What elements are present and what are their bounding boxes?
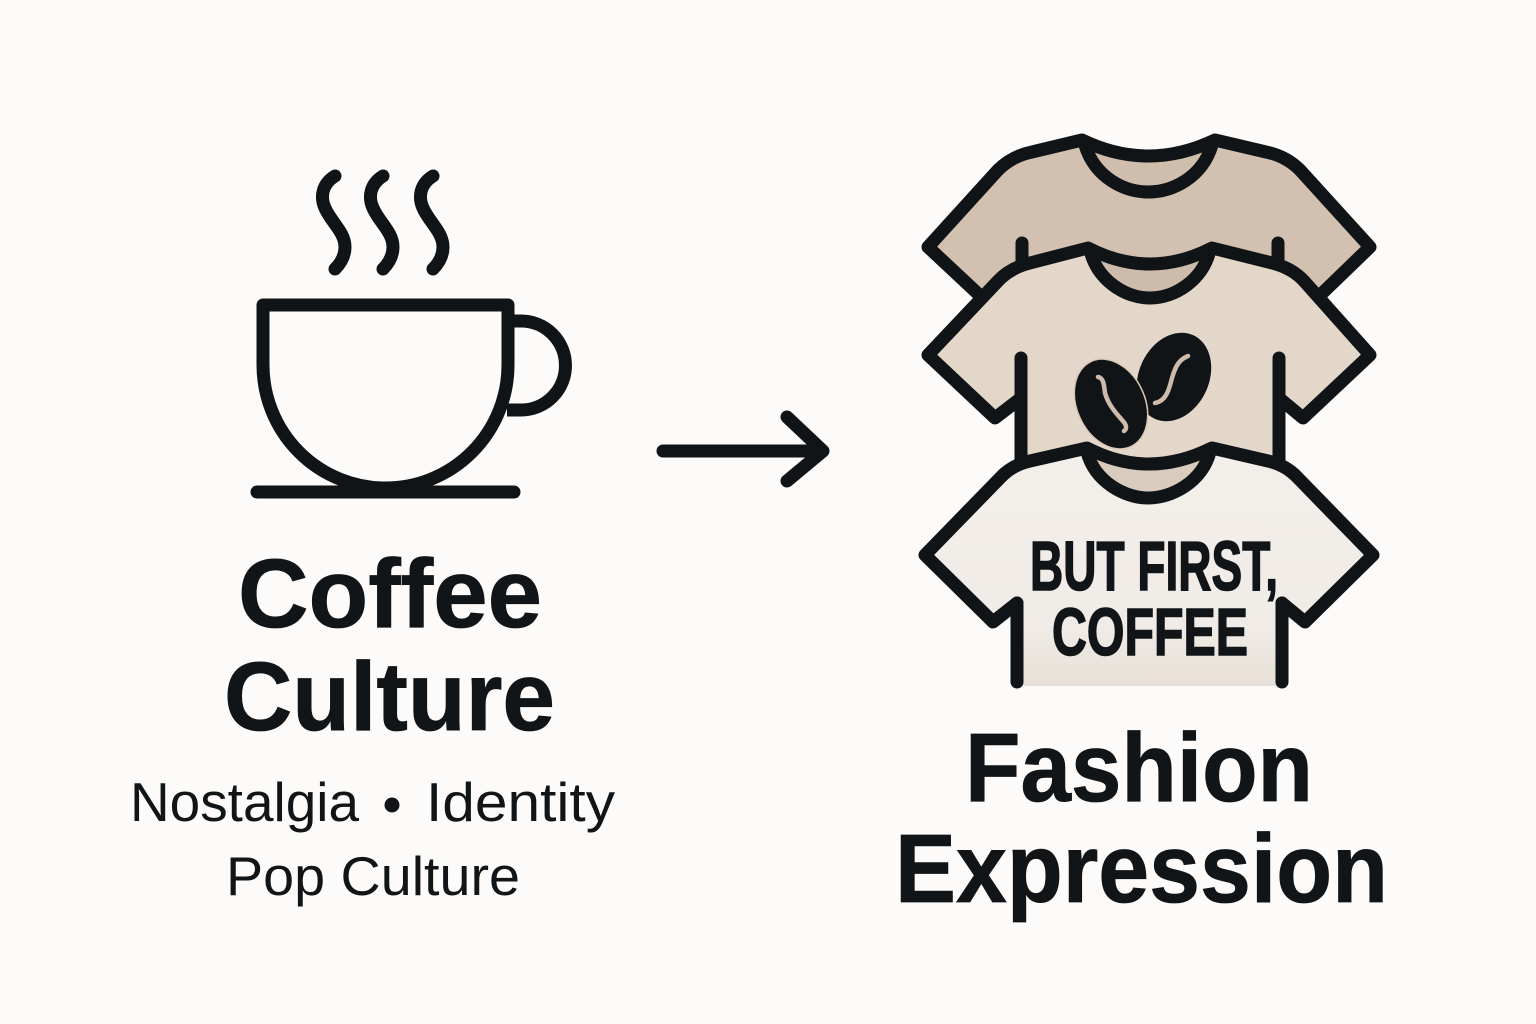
subtitle: themes: [130, 771, 616, 907]
slogan: BUT FIRST,: [1030, 527, 1278, 605]
slogan: [1030, 527, 1278, 670]
icon: steaming coffee cup: [257, 176, 565, 492]
heading: fashion expression: Fashion: [965, 713, 1313, 822]
cup body: [263, 305, 508, 488]
subtitle: themes: Nostalgia: [130, 771, 359, 833]
subtitle: themes: Pop Culture: [226, 845, 520, 907]
shirt: middle beige with coffee beans: [928, 248, 1370, 475]
heading: coffee culture: Coffee: [238, 539, 542, 648]
panel: fashion expression: [895, 140, 1388, 923]
heading: coffee culture: [224, 539, 555, 751]
subtitle: themes: Identity: [426, 771, 616, 833]
icon: stacked t-shirts: [925, 140, 1373, 686]
panel: coffee culture: [130, 176, 616, 907]
heading: coffee culture: Culture: [224, 642, 555, 751]
slogan: COFFEE: [1052, 595, 1248, 670]
saucer: [257, 486, 514, 498]
arrow: [663, 417, 823, 481]
steam: [322, 176, 443, 269]
shirt: front cream with slogan: [925, 448, 1373, 686]
icon: coffee beans: [1060, 321, 1225, 461]
shirt: back tan: [928, 140, 1370, 305]
cup handle: [507, 321, 565, 410]
heading: fashion expression: [895, 713, 1388, 923]
heading: fashion expression: Expression: [895, 814, 1388, 923]
